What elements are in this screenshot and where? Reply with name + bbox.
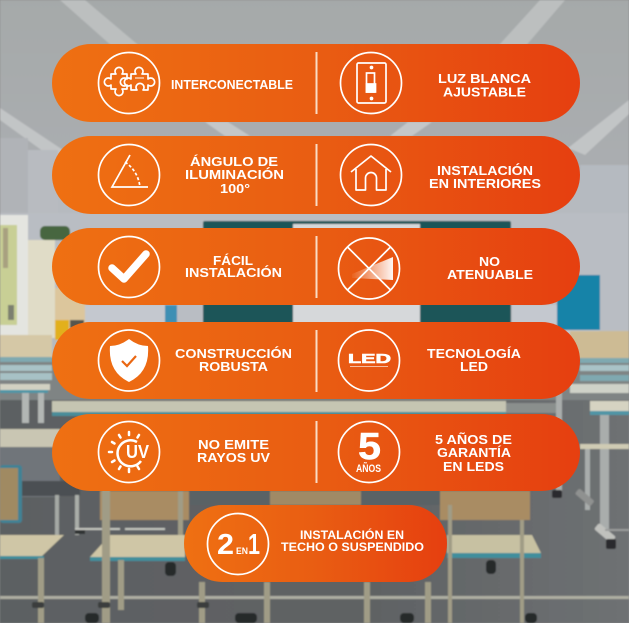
text: angulo de iluminacion: ILUMINACIÓN	[185, 167, 284, 182]
icon: UV sun: UV	[126, 442, 149, 462]
text: interconectable: INTERCONECTABLE	[171, 78, 293, 92]
text: facil instalacion	[185, 253, 282, 280]
icon: 2 en 1: EN	[236, 546, 248, 557]
text: angulo de iluminacion	[185, 154, 284, 196]
text: 5 anos de garantia: 5 AÑOS DE	[435, 432, 512, 447]
desks, right	[580, 358, 629, 363]
text: instalacion en techo o suspendido	[281, 529, 424, 554]
text: no atenuable	[447, 255, 533, 282]
window	[0, 215, 28, 335]
icon: 2 en 1	[208, 514, 268, 574]
text: no atenuable: ATENUABLE	[447, 268, 533, 282]
text: 5 anos de garantia: GARANTÍA	[437, 445, 511, 460]
icon: 5 years: AÑOS	[356, 462, 381, 475]
panel: 2 en 1	[184, 505, 447, 582]
icon: not dimmable	[338, 238, 400, 299]
text: no emite rayos uv: NO EMITE	[198, 438, 269, 452]
text: instalacion en interiores: INSTALACIÓN	[437, 163, 533, 178]
icon: UV sun	[98, 422, 160, 482]
text: facil instalacion: INSTALACIÓN	[185, 265, 282, 280]
text: construccion robusta	[175, 346, 292, 374]
panel: row 2	[52, 136, 580, 214]
center desk row	[52, 401, 506, 414]
icon: puzzle pieces	[98, 52, 160, 114]
text: tecnologia led	[427, 346, 521, 374]
front desks	[90, 535, 185, 558]
panel: row 4	[52, 322, 580, 399]
text: luz blanca ajustable	[438, 72, 531, 100]
icon: LED	[338, 330, 400, 391]
icon: LED: LED	[348, 351, 391, 366]
text: angulo de iluminacion: ÁNGULO DE	[190, 154, 278, 169]
icon: angle	[98, 144, 160, 206]
panel: row 3	[52, 228, 580, 305]
text: construccion robusta: CONSTRUCCIÓN	[175, 346, 292, 361]
icon: house	[340, 144, 402, 206]
text: no emite rayos uv	[197, 438, 271, 465]
text: instalacion en interiores: EN INTERIORES	[429, 177, 541, 191]
icon: 5 years	[338, 422, 400, 482]
icon: 2 en 1: 1	[248, 529, 260, 561]
panel: row 5	[52, 414, 580, 491]
chairs row	[100, 491, 189, 520]
icon: 5 years: 5	[358, 426, 381, 468]
text: angulo de iluminacion: 100°	[220, 182, 250, 196]
text: construccion robusta: ROBUSTA	[199, 360, 268, 374]
text: facil instalacion: FÁCIL	[213, 253, 253, 268]
desks, left	[0, 357, 52, 362]
icon: check mark	[98, 236, 160, 298]
panel: row 1	[52, 44, 580, 122]
text: luz blanca ajustable: AJUSTABLE	[443, 86, 526, 100]
icon: shield	[98, 330, 160, 391]
text: tecnologia led: TECNOLOGÍA	[427, 346, 521, 361]
text: tecnologia led: LED	[460, 360, 488, 374]
icon: 2 en 1: 2	[217, 529, 234, 561]
text: instalacion en techo o suspendido: INSTALACIÓN EN	[300, 529, 404, 542]
floor rods and legs	[0, 596, 629, 599]
text: instalacion en techo o suspendido: TECHO O SUSPENDIDO	[281, 542, 424, 554]
text: 5 anos de garantia	[435, 432, 512, 474]
text: 5 anos de garantia: EN LEDS	[443, 460, 504, 474]
text: no atenuable: NO	[479, 255, 500, 269]
text: luz blanca ajustable: LUZ BLANCA	[438, 72, 531, 86]
text: no emite rayos uv: RAYOS UV	[197, 451, 271, 465]
icon: wall switch	[340, 52, 402, 114]
text: instalacion en interiores	[429, 163, 541, 191]
